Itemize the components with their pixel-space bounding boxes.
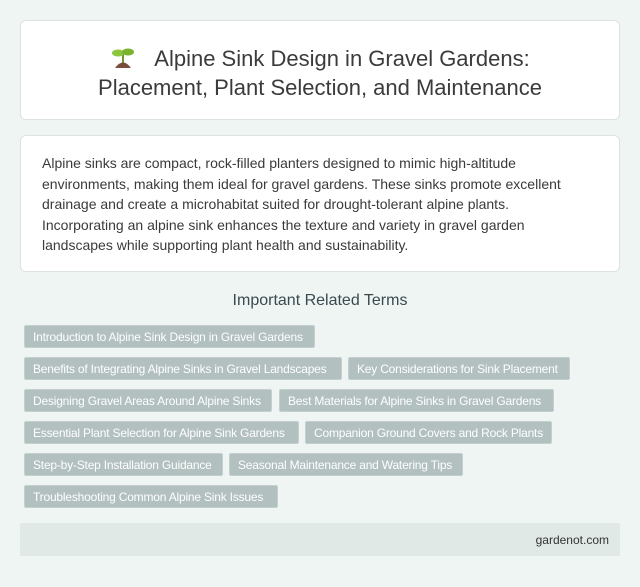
tag 4: Designing Gravel Areas Around Alpine Sinks	[33, 394, 261, 408]
footer	[20, 523, 620, 556]
footer text: gardenot.com	[536, 533, 609, 547]
tag 10: Troubleshooting Common Alpine Sink Issues	[33, 490, 263, 504]
tag 5: Best Materials for Alpine Sinks in Gravel Gardens	[288, 394, 541, 408]
tag 7	[305, 421, 552, 444]
title: Alpine Sink Design in Gravel Gardens:	[154, 46, 530, 71]
tag 7: Companion Ground Covers and Rock Plants	[314, 426, 543, 440]
tag 10	[24, 485, 278, 508]
description card	[20, 135, 620, 272]
description text: drainage and create a microhabitat suited for drought-tolerant alpine plants.	[42, 196, 509, 212]
tag 1	[24, 325, 315, 348]
tag 3: Key Considerations for Sink Placement	[357, 362, 558, 376]
description text: environments, making them ideal for gravel gardens. These sinks promote excellent	[42, 176, 561, 192]
tag 9: Seasonal Maintenance and Watering Tips	[238, 458, 452, 472]
tag 6	[24, 421, 299, 444]
description text: Alpine sinks are compact, rock-filled planters designed to mimic high-altitude	[42, 155, 516, 171]
tag 9	[229, 453, 463, 476]
description text	[42, 155, 561, 253]
description text: landscapes while supporting plant health and sustainability.	[42, 237, 408, 253]
tag 8: Step-by-Step Installation Guidance	[33, 458, 212, 472]
tag 5	[279, 389, 554, 412]
header card	[20, 20, 620, 120]
tag 1: Introduction to Alpine Sink Design in Gravel Gardens	[33, 330, 303, 344]
title: Placement, Plant Selection, and Maintenance	[98, 75, 542, 100]
tag 2: Benefits of Integrating Alpine Sinks in Gravel Landscapes	[33, 362, 326, 376]
tag 6: Essential Plant Selection for Alpine Sink Gardens	[33, 426, 285, 440]
icon: sprout	[112, 48, 134, 68]
title	[98, 46, 542, 100]
tag 4	[24, 389, 272, 412]
description text: Incorporating an alpine sink enhances the texture and variety in gravel garden	[42, 216, 525, 232]
tag 3	[348, 357, 570, 380]
related terms heading: Important Related Terms	[233, 292, 407, 309]
tag 8	[24, 453, 223, 476]
tag 2	[24, 357, 342, 380]
